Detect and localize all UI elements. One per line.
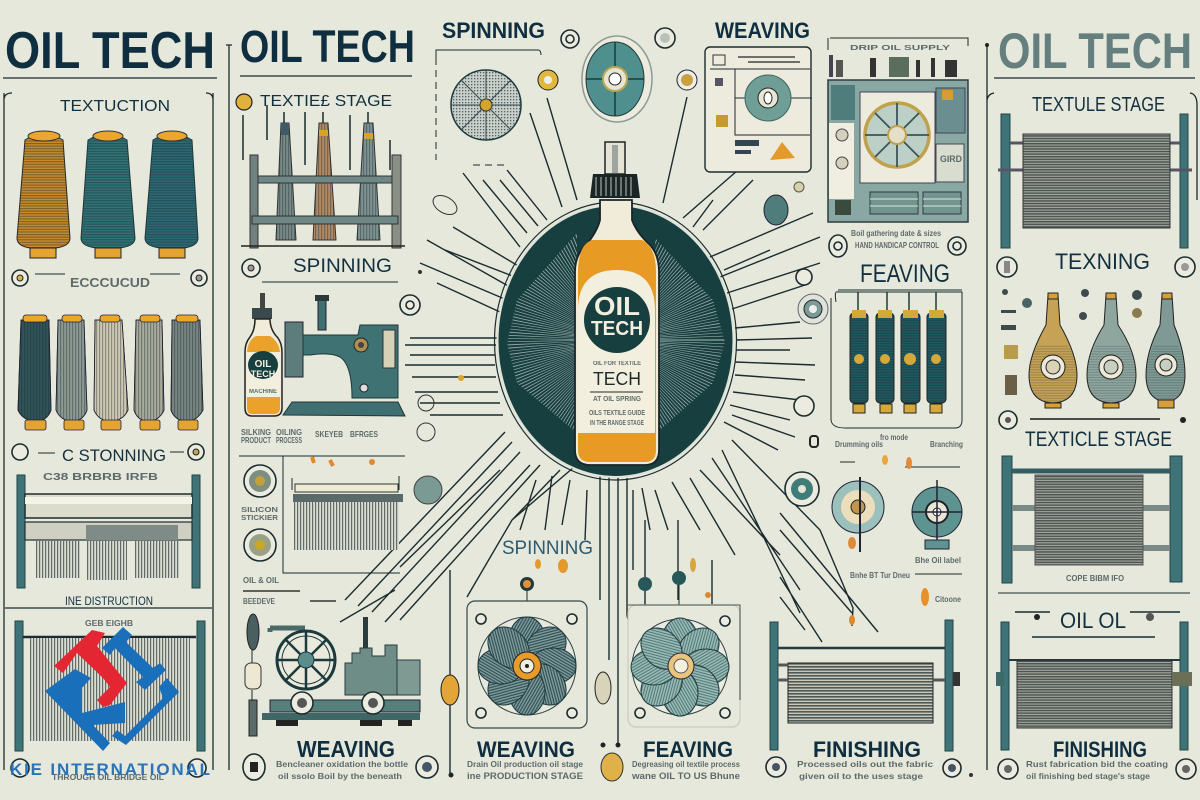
icon: three oil flasks: [1029, 293, 1185, 408]
central oil bottle: OILS TEXTILE GUIDE: [589, 410, 645, 417]
heading and text: weaving centre: ine PRODUCTION STAGE: [467, 771, 583, 781]
gauges and notes lower right of oval: fro mode: [880, 432, 908, 442]
heading and text: finishing right: FINISHING: [1053, 737, 1147, 762]
panel: second column: [226, 21, 420, 781]
gauges and notes lower right of oval: Bhe Oil label: [915, 555, 961, 565]
heading: textuction: TEXTUCTION: [60, 98, 170, 115]
central dark oval: [494, 202, 736, 480]
central oil bottle: OIL: [594, 291, 640, 321]
caption: Boil gathering date & sizes: [851, 228, 941, 238]
icon: loom three: [996, 622, 1192, 750]
icon: sewing machine: [283, 295, 420, 416]
heading and text: feaving centre: Degreasing oil textile process: [632, 759, 740, 769]
medallion row at top centre: [538, 28, 697, 122]
heading: texning: TEXNING: [1055, 249, 1150, 274]
icon: fan wheel: [451, 70, 521, 140]
gauges and notes lower right of oval: Drumming oils: [835, 439, 883, 449]
small instrument strip: [836, 57, 957, 77]
panel: bottom centre flowers: [416, 538, 786, 781]
icon: roller loom: [17, 475, 200, 588]
icon: small oil bottle: OIL: [255, 359, 271, 370]
small notes: OIL & OIL: [243, 575, 279, 585]
caption block: SILKING: [241, 427, 271, 437]
gauges and notes lower right of oval: Bnhe BT Tur Dneu: [850, 570, 910, 580]
icon: loom two: COPE BIBM IFO: [1066, 573, 1124, 583]
heading and text: finishing: Processed oils out the fabric: [797, 759, 933, 769]
panel: spinning fan top centre: [436, 18, 545, 165]
heading and text: weaving: Bencleaner oxidation the bottle: [276, 759, 408, 769]
heading: texticle stage: [999, 411, 1186, 451]
heading: texning: [997, 249, 1195, 277]
panel: flower two: [628, 605, 740, 727]
heading: textile stage: TEXTIE£ STAGE: [260, 93, 392, 110]
central oil bottle: [575, 142, 659, 465]
icon: small oil bottle: MACHINE: [249, 389, 277, 395]
side medallions around oval: [414, 182, 828, 506]
logo: KIE mark: [45, 627, 179, 751]
caption block: SKEYEB: [315, 429, 343, 439]
icon: lower loom: [15, 621, 205, 751]
small caption above loom: GEB EIGHB: [85, 618, 133, 628]
caption: HAND HANDICAP CONTROL: [855, 240, 939, 250]
central oil bottle: TECH: [593, 369, 641, 389]
panel: left column: [3, 22, 217, 782]
icon: tool: [245, 614, 261, 736]
caption: instruction: INE DISTRUCTION: [65, 594, 153, 608]
heading: texticle stage: TEXTICLE STAGE: [1025, 428, 1172, 451]
caption block: PRODUCT: [241, 435, 272, 445]
caption block: BFRGES: [350, 429, 378, 439]
gauges and notes lower right of oval: [832, 432, 963, 625]
heading: spinning: SPINNING: [293, 256, 392, 277]
icon: two gauges: SILICON: [241, 507, 278, 514]
icon: hanging drops: [441, 558, 711, 748]
heading: weaving: WEAVING: [715, 18, 810, 43]
heading: stonning: C STONNING: [62, 446, 166, 465]
heading: spinning: [242, 256, 398, 282]
heading and text: finishing: FINISHING: [813, 737, 921, 762]
rings and note at the foot of left panel: THROUGH OIL BRIDGE OIL: [52, 772, 164, 782]
icon: finishing loom: [770, 620, 960, 751]
icon: small oil bottle: TECH: [251, 369, 275, 379]
heading and text: weaving: [243, 736, 408, 781]
icon: five bobbins: [18, 315, 203, 430]
panel: machine top right: DRIP OIL SUPPLY: [850, 45, 951, 52]
brand name: KIE INTERNATIONAL: [10, 760, 210, 779]
central oil bottle: AT OIL SPRING: [593, 396, 642, 403]
icon: comb: [292, 457, 403, 550]
radial rays from the central bottle: [340, 97, 878, 775]
caption: [829, 228, 966, 257]
small notes: [243, 575, 336, 606]
icon: loom one: [998, 114, 1192, 248]
icon: four bobbins: [831, 290, 962, 428]
small notes: BEEDEVE: [243, 596, 275, 606]
heading and text: feaving centre: FEAVING: [643, 737, 733, 762]
caption row with rings: ECCCUCUD: [70, 275, 150, 290]
panel: weaving chart box: [705, 18, 812, 172]
icon: small oil bottle: [245, 293, 282, 416]
central oil bottle: IN THE RANGE STAGE: [590, 420, 644, 427]
panel: finishing loom: [770, 620, 961, 781]
heading: spinning: SPINNING: [502, 538, 593, 559]
heading: oil ol: [1015, 608, 1180, 637]
icon: left gauge: [832, 477, 884, 552]
heading: textule stage: TEXTULE STAGE: [1032, 94, 1165, 116]
heading and text: finishing right: Rust fabrication bid the coating: [1026, 759, 1168, 769]
panel: machine top right: [828, 38, 968, 428]
panel: flower one: [467, 601, 587, 728]
rings at the base: [416, 753, 786, 781]
icon: two gauges: STICKIER: [241, 515, 278, 522]
icon: three thread cones: [17, 131, 198, 258]
icon: spindle rack: [241, 105, 405, 248]
central oil bottle: TECH: [591, 318, 643, 340]
heading and text: weaving centre: [467, 737, 583, 781]
gauges and notes lower right of oval: Citoone: [935, 594, 961, 604]
icon: loom two: [1002, 456, 1182, 583]
heading and text: feaving centre: [631, 737, 740, 781]
heading and text: finishing: [797, 737, 961, 781]
heading: oil ol: OIL OL: [1060, 608, 1126, 633]
title: oil tech left: OIL TECH: [5, 22, 215, 80]
heading: spinning: SPINNING: [442, 18, 545, 43]
caption block: PROCESS: [276, 435, 302, 445]
heading and text: weaving centre: Drain Oil production oil stage: [467, 759, 583, 769]
caption block: OILING: [276, 427, 302, 437]
heading: feaving: FEAVING: [860, 260, 950, 288]
title: oil tech second: OIL TECH: [240, 21, 415, 72]
icon: right gauge: [912, 480, 962, 549]
gauges and notes lower right of oval: Branching: [930, 439, 963, 449]
icon: control panel: GIRD: [940, 154, 962, 164]
heading and text: weaving centre: WEAVING: [477, 737, 575, 762]
heading: stonning: [12, 444, 204, 483]
rings and note at the foot of left panel: [11, 759, 206, 782]
caption block: [241, 427, 378, 445]
icon: two gauges: [241, 465, 278, 561]
heading and text: weaving: WEAVING: [297, 736, 395, 762]
heading and text: finishing right: [998, 737, 1196, 781]
panel: right column: [969, 23, 1197, 781]
central oil bottle: OIL FOR TEXTILE: [593, 361, 641, 367]
caption row with rings: [12, 270, 207, 290]
icon: teal dial: [745, 75, 791, 121]
heading and text: weaving: oil ssolo Boil by the beneath: [278, 771, 402, 781]
icon: control panel: [828, 80, 968, 222]
heading: stonning: C38 BRBRB IRFB: [43, 472, 158, 483]
heading and text: finishing: given oil to the uses stage: [799, 771, 923, 781]
heading and text: finishing right: oil finishing bed stage's stage: [1026, 771, 1150, 781]
icon: weaving machine: [262, 617, 420, 726]
small icons beside flasks: [1001, 289, 1142, 395]
heading and text: feaving centre: wane OIL TO US Bhune: [631, 771, 740, 781]
